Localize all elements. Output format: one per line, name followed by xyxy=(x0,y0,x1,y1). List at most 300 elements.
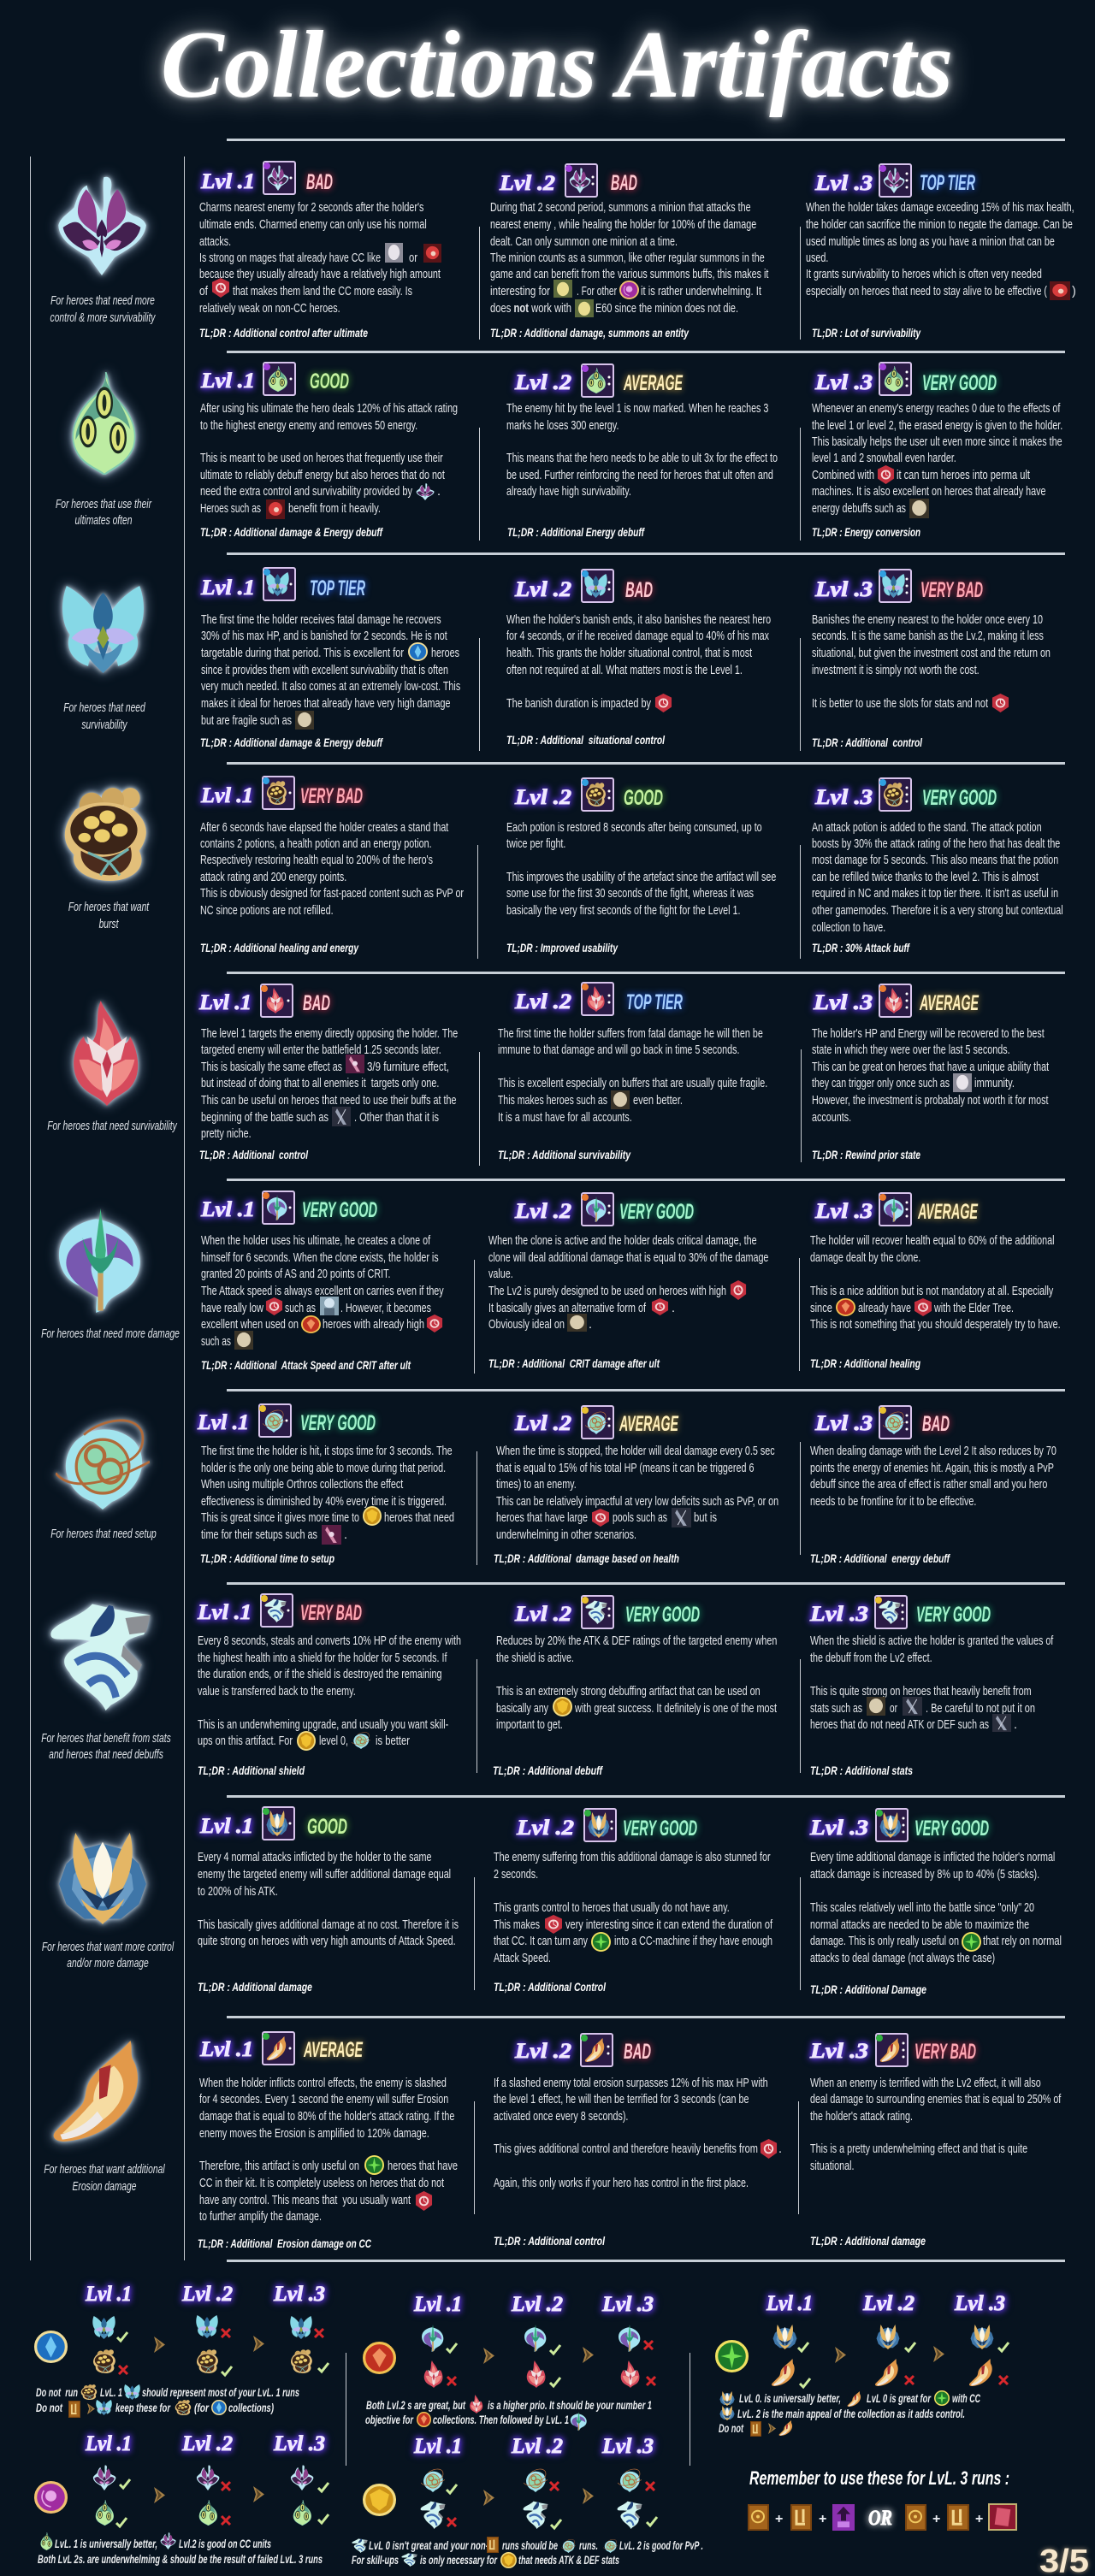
audience caption xyxy=(44,2162,166,2193)
description inline row xyxy=(199,2156,458,2211)
class icon xyxy=(717,2342,747,2371)
tldr: TL;DR : Additional damage & Energy debuff xyxy=(200,736,383,749)
description: This is a nice addition but is not mandatory at all. Especially xyxy=(810,1283,1054,1297)
class icon xyxy=(36,2483,66,2512)
description inline row: . However, it becomes xyxy=(340,1302,431,1315)
audience caption xyxy=(50,293,156,324)
level headers: Lvl .1 xyxy=(766,2292,813,2315)
description: The level 1 targets the enemy directly opposing the holder. The xyxy=(201,1025,458,1040)
description: already have high survivability. xyxy=(506,483,631,498)
advice: Both LvL 2s. are underwhelming & should be the result of failed LvL. 3 runs xyxy=(38,2552,323,2566)
description: to the highest energy enemy and removes 50 energy. xyxy=(200,417,417,432)
advice: For skill-ups xyxy=(352,2553,399,2567)
description inline row: pools such as xyxy=(613,1511,667,1525)
card xyxy=(263,1807,294,1840)
level 3 xyxy=(812,570,1051,749)
level headers: Lvl .1 xyxy=(413,2293,462,2316)
description: be used. Further reinforcing the need for heroes that ult often and xyxy=(506,467,773,482)
description: used multiple times as long as you have a minion that can be xyxy=(806,233,1055,248)
level 2 xyxy=(490,164,769,340)
rating: TOP TIER xyxy=(920,171,975,195)
advice: Do not xyxy=(719,2421,744,2435)
level headers: Lvl .3 xyxy=(601,2293,654,2316)
description inline row xyxy=(496,1508,717,1527)
level headers: Lvl .2 xyxy=(181,2432,233,2455)
description inline row: since xyxy=(810,1302,832,1315)
description inline row xyxy=(506,694,672,712)
level 3 xyxy=(809,1596,1054,1777)
level 1: Lvl .1 xyxy=(199,2038,253,2061)
description: the level 1 effect, he will then be terrified for 3 seconds (can be xyxy=(494,2091,749,2106)
level 1 xyxy=(198,984,458,1161)
description inline row: such as xyxy=(201,1335,231,1349)
tldr: TL;DR : Additional control xyxy=(494,2234,606,2248)
description inline row: . Be careful to not put it on xyxy=(926,1702,1035,1716)
description inline row: This gives additional control and therefore heavily benefits from xyxy=(494,2142,758,2156)
audience caption xyxy=(68,900,150,931)
tldr: TL;DR : Additional Damage xyxy=(810,1982,926,1996)
level 2 xyxy=(506,364,778,539)
audience caption: ultimates often xyxy=(75,513,132,527)
description: investment it is simply not worth the cost. xyxy=(812,662,980,676)
level 2: Lvl .2 xyxy=(514,2040,571,2063)
description: Whenever an enemy's energy reaches 0 due to the effects of xyxy=(812,400,1061,415)
tldr: TL;DR : Additional debuff xyxy=(493,1764,603,1777)
tldr: TL;DR : Additional stats xyxy=(810,1764,913,1777)
audience caption xyxy=(41,1731,171,1761)
rating: GOOD xyxy=(307,1815,347,1839)
rating: VERY GOOD xyxy=(623,1817,697,1840)
description: game and can benefit from the various summons buffs, this makes it xyxy=(490,266,769,281)
description: 30% of his max HP, and is banished for 2 seconds. He is not xyxy=(201,628,447,642)
description: dealt. Can only summon one minion at a time. xyxy=(490,233,678,248)
description inline row: This makes heroes such as xyxy=(498,1094,607,1108)
description: 2 seconds. xyxy=(494,1866,538,1881)
description xyxy=(201,1443,453,1508)
description: This can be useful on heroes that need to use their buffs at the xyxy=(201,1092,456,1107)
description xyxy=(812,400,1062,498)
description inline row xyxy=(494,2139,782,2159)
level 1 xyxy=(200,777,465,954)
card xyxy=(582,1406,613,1439)
advice: should represent most of your LvL. 1 runs xyxy=(142,2385,299,2399)
description: The Attack speed is always excellent on carries even if they xyxy=(201,1283,444,1297)
level 2: Lvl .2 xyxy=(514,1603,571,1626)
description: relatively weak on non-CC heroes. xyxy=(199,300,340,315)
description: This is an extremely strong debuffing artifact that can be used on xyxy=(496,1683,761,1698)
description: enemy moves the Erosion is amplified to 120% damage. xyxy=(199,2125,429,2140)
level 2: Lvl .2 xyxy=(516,1817,574,1840)
card xyxy=(876,2034,908,2066)
advice: LvL 0 is great for xyxy=(867,2391,932,2405)
card xyxy=(263,777,294,809)
description inline row: 3/9 furniture effect, xyxy=(367,1061,449,1074)
card xyxy=(581,2034,613,2066)
level headers: Lvl .3 xyxy=(954,2292,1005,2315)
description: However, the investment is probabaly not worth it for most xyxy=(812,1092,1049,1107)
description xyxy=(494,1849,771,1964)
card xyxy=(565,164,597,197)
audience caption: survivability xyxy=(81,718,127,731)
card xyxy=(879,570,911,602)
description: to further amplify the damage. xyxy=(199,2208,322,2223)
level 1: Lvl .1 xyxy=(200,369,255,393)
card xyxy=(263,363,295,395)
artifact icon xyxy=(74,1001,138,1106)
priority panel: red class xyxy=(364,2293,655,2431)
description: The first time the holder is hit, it stops time for 3 seconds. The xyxy=(201,1443,453,1457)
reminder cards: + xyxy=(819,2512,826,2526)
description: This can be great on heroes that have a unique ability that xyxy=(812,1059,1050,1073)
card xyxy=(582,1193,613,1226)
description: required in NC and makes it top tier there. It isn't as useful in xyxy=(812,885,1058,900)
description inline row: is better xyxy=(376,1734,410,1748)
description: activated once every 8 seconds). xyxy=(494,2108,628,2123)
rating: VERY GOOD xyxy=(619,1200,694,1224)
description: points the energy of enemies hit. Again, this is mostly a PvP xyxy=(810,1460,1054,1474)
card xyxy=(263,2032,294,2065)
tldr: TL;DR : Additional energy debuff xyxy=(810,1551,950,1565)
description inline row xyxy=(490,280,761,317)
description: health. This grants the holder situational control, that is most xyxy=(506,645,752,659)
description inline row: . xyxy=(672,1302,675,1315)
description inline row: E60 since the minion does not die. xyxy=(595,302,738,316)
description inline row: such as xyxy=(285,1302,316,1315)
description: This is not something that you should desperately try to have. xyxy=(810,1316,1061,1331)
description xyxy=(810,1232,1061,1331)
rating: VERY BAD xyxy=(914,2040,976,2064)
audience caption: For heroes that want more control xyxy=(42,1940,175,1953)
artifact icon xyxy=(73,372,135,475)
tldr: TL;DR : Additional damage xyxy=(198,1980,312,1994)
description inline row: but are fragile such as xyxy=(201,714,292,728)
description inline row xyxy=(496,1698,777,1716)
level 1 xyxy=(197,1594,461,1777)
advice: is a higher prio. It should be your number 1 xyxy=(488,2398,652,2412)
description: When the holder takes damage exceeding 15% of his max health, xyxy=(806,199,1074,214)
tldr: TL;DR : Improved usability xyxy=(506,941,619,954)
class icon xyxy=(364,2343,394,2372)
description: himself for 6 seconds. When the clone exists, the holder is xyxy=(201,1250,439,1264)
description inline row: level 0, xyxy=(319,1734,348,1748)
description xyxy=(498,1025,767,1124)
tldr: TL;DR : Additional control xyxy=(199,1148,309,1161)
advice: keep these for xyxy=(115,2401,171,2414)
audience caption: and heroes that need debuffs xyxy=(49,1747,163,1761)
audience caption: For heroes that benefit from stats xyxy=(41,1731,171,1745)
audience caption xyxy=(56,497,152,527)
artifact icon xyxy=(54,2041,138,2142)
description: When the shield is active the holder is granted the values of xyxy=(810,1633,1054,1647)
advice: (for xyxy=(194,2401,210,2414)
description inline row: The banish duration is impacted by xyxy=(506,697,652,711)
description: twice per fight. xyxy=(506,836,565,850)
card xyxy=(879,1193,911,1226)
level headers: Lvl .2 xyxy=(511,2293,563,2316)
description: This means that the hero needs to be able to ult 3x for the effect to xyxy=(506,450,778,464)
description xyxy=(506,819,776,917)
card xyxy=(263,162,295,194)
rating: BAD xyxy=(625,578,653,602)
advice: is only necessary for xyxy=(420,2553,498,2567)
level 1: Lvl .1 xyxy=(200,784,253,807)
rating: AVERAGE xyxy=(303,2038,364,2062)
level 2 xyxy=(488,1193,768,1370)
upgrade grid xyxy=(421,2469,657,2529)
level headers: Lvl .1 xyxy=(85,2432,132,2455)
description: targeted enemy will enter the battlefield 1.25 seconds later. xyxy=(201,1042,441,1056)
advice xyxy=(352,2537,703,2567)
card xyxy=(582,983,613,1015)
description: It grants survivability to heroes which is often very needed xyxy=(806,266,1042,281)
description inline row: of xyxy=(199,285,209,298)
row 4: sack artifact xyxy=(65,777,1063,954)
description xyxy=(496,1633,777,1731)
description: Respectively restoring health equal to 200% of the hero's xyxy=(200,852,433,866)
description inline row: need the extra control and survivability provided by xyxy=(200,485,413,499)
description inline row xyxy=(806,281,1076,300)
left column rule xyxy=(30,157,31,2260)
description: boosts by 30% the attack rating of the hero that has dealt the xyxy=(812,836,1060,850)
description: When the holder inflicts control effects, the enemy is slashed xyxy=(199,2075,447,2089)
description: This can be relatively impactful at very low deficits such as PvP, or on xyxy=(496,1493,778,1508)
advice: collections) xyxy=(228,2401,274,2414)
rating: BAD xyxy=(303,991,330,1015)
level headers: Lvl .2 xyxy=(511,2435,563,2458)
level 2: Lvl .2 xyxy=(514,786,571,809)
description: for 4 secondes. Every 1 second the enemy will suffer Erosion xyxy=(199,2091,448,2106)
description inline row xyxy=(494,1915,773,1951)
description xyxy=(198,1633,461,1731)
description inline row xyxy=(812,694,1009,712)
description: quite strong on heroes with very high amounts of Attack Speed. xyxy=(198,1933,456,1947)
description inline row xyxy=(201,1297,442,1350)
audience caption: For heroes that want additional xyxy=(44,2162,166,2176)
description: CC in their kit. It is completely useless on heroes that do not xyxy=(199,2175,444,2189)
description: When using multiple Orthros collections the effect xyxy=(201,1476,404,1491)
level 2: Lvl .2 xyxy=(514,1412,571,1435)
card xyxy=(261,1594,293,1627)
tldr: TL;DR : Additional damage & Energy debuff xyxy=(200,525,383,539)
description: damage dealt by the clone. xyxy=(810,1250,920,1264)
description xyxy=(198,1849,459,1947)
description: underwhelming in other scenarios. xyxy=(496,1527,636,1541)
description inline row: . Other than that it is xyxy=(354,1111,439,1125)
description: Each potion is restored 8 seconds after being consumed, up to xyxy=(506,819,762,834)
description xyxy=(506,612,771,676)
description: attack rating and 200 energy points. xyxy=(200,869,346,883)
reminder cards: + xyxy=(932,2512,940,2526)
level 3: Lvl .3 xyxy=(814,786,873,809)
description: When an enemy is terrified with the Lv2 effect, it will also xyxy=(810,2075,1041,2089)
level 3: Lvl .3 xyxy=(814,1200,873,1223)
tldr: TL;DR : Additional healing and energy xyxy=(200,941,359,954)
description xyxy=(200,819,465,917)
card xyxy=(879,1406,911,1439)
priority panel: magenta class xyxy=(36,2432,328,2566)
description: effectiveness is diminished by 40% every time it is triggered. xyxy=(201,1493,447,1508)
card xyxy=(582,1596,613,1628)
description inline row: damage. This is only really useful on xyxy=(810,1935,959,1948)
level headers: Lvl .1 xyxy=(413,2435,462,2458)
description: normal attacks are needed to be able to maximize the xyxy=(810,1917,1029,1931)
tldr: TL;DR : Rewind prior state xyxy=(812,1148,920,1161)
description inline row xyxy=(198,1732,410,1750)
description: Again, this only works if your hero has control in the first place. xyxy=(494,2175,749,2189)
audience caption: and/or more damage xyxy=(67,1956,149,1970)
description: needs to be frontline for it to be effective. xyxy=(810,1493,976,1508)
description: The holder will recover health equal to 60% of the additional xyxy=(810,1232,1055,1247)
description: When dealing damage with the Level 2 It also reduces by 70 xyxy=(810,1443,1057,1457)
description: very much needed. It also comes at an extremely low-cost. This xyxy=(201,678,460,693)
description: state in which they were over the last 5 seconds. xyxy=(812,1042,1010,1056)
description: The enemy suffering from this additional damage is also stunned for xyxy=(494,1849,771,1864)
description inline row: Combined with xyxy=(812,469,874,482)
advice: Lvl.2 is good on CC units xyxy=(179,2537,271,2550)
description inline row: that CC. It can turn any xyxy=(494,1935,589,1948)
advice xyxy=(365,2395,652,2431)
card xyxy=(259,1404,291,1437)
rating: AVERAGE xyxy=(917,1200,979,1224)
row 6: sword artifact xyxy=(41,1191,1061,1372)
description inline row: have really low xyxy=(201,1302,263,1315)
description: This is obviously designed for fast-paced content such as PvP or xyxy=(200,885,465,900)
description inline row: ups on this artifact. For xyxy=(198,1734,293,1748)
tldr: TL;DR : Additional damage xyxy=(810,2234,926,2248)
audience caption: For heroes that need survivability xyxy=(47,1119,177,1132)
level 1 xyxy=(200,1191,444,1372)
rating: VERY BAD xyxy=(300,784,363,808)
card xyxy=(582,570,613,602)
level 1 xyxy=(200,363,458,539)
description inline row: they can trigger only once such as xyxy=(812,1077,950,1090)
description inline row: The Lv2 is purely designed to be used on heroes with high xyxy=(488,1285,726,1298)
level headers: Lvl .3 xyxy=(273,2283,325,2306)
description: attacks to deal damage (not always the case) xyxy=(810,1950,995,1964)
advice: LvL 0. is universally better, xyxy=(739,2391,841,2405)
description xyxy=(199,2075,454,2223)
tldr: TL;DR : Additional survivability xyxy=(498,1148,631,1161)
rating: VERY BAD xyxy=(300,1601,362,1625)
advice: LvL. 2 is good for PvP . xyxy=(619,2538,703,2552)
description: accounts. xyxy=(812,1109,851,1124)
rating: VERY GOOD xyxy=(300,1411,376,1435)
class icon xyxy=(364,2485,394,2514)
level headers: Lvl .3 xyxy=(273,2432,325,2455)
audience caption: burst xyxy=(99,917,119,931)
level 1: Lvl .1 xyxy=(197,1601,252,1624)
advice: collections. Then followed by LvL. 1 xyxy=(433,2413,569,2426)
description: used. xyxy=(806,250,828,264)
description: Attack Speed. xyxy=(494,1950,551,1964)
level 1: Lvl .1 xyxy=(200,170,255,193)
description xyxy=(810,1849,1055,1964)
advice: with CC xyxy=(952,2391,981,2405)
audience caption: For heroes that need more xyxy=(50,293,155,307)
description inline row: but is xyxy=(694,1511,717,1525)
description xyxy=(199,199,441,315)
description xyxy=(201,1232,444,1297)
card xyxy=(879,363,911,395)
description: This basically helps the user ult even more since it makes the xyxy=(812,434,1062,448)
description: This is a pretty underwhelming effect and that is quite xyxy=(810,2141,1027,2155)
description: collection to have. xyxy=(812,919,885,934)
description xyxy=(810,2075,1062,2172)
description inline row: basically any xyxy=(496,1702,549,1716)
description: damage that is equal to 80% of the holder's attack rating. If the xyxy=(199,2108,454,2123)
description: times) to an enemy. xyxy=(496,1476,577,1491)
description inline row: have any control. This means that you usually want xyxy=(199,2194,411,2207)
rating: AVERAGE xyxy=(919,991,980,1015)
description inline row xyxy=(810,1298,1014,1316)
description: The enemy hit by the level 1 is now marked. When he reaches 3 xyxy=(506,400,768,415)
description: This is meant to be used on heroes that frequently use their xyxy=(200,450,443,464)
description inline row: that rely on normal xyxy=(983,1935,1062,1948)
rating: VERY GOOD xyxy=(922,371,997,395)
title: Collections Artifacts xyxy=(161,12,953,118)
advice xyxy=(38,2532,323,2566)
description inline row: heroes that do not need ATK or DEF such as xyxy=(810,1718,989,1732)
advice xyxy=(36,2384,299,2418)
description inline row: beginning of the battle such as xyxy=(201,1111,328,1125)
reminder cards: + xyxy=(775,2512,783,2526)
description: The first time the holder receives fatal damage he recovers xyxy=(201,612,441,626)
level 3: Lvl .3 xyxy=(814,578,873,601)
description: the level 1 or level 2, the erased energy is given to the holder. xyxy=(812,417,1062,432)
description xyxy=(810,1443,1057,1508)
description inline row: It basically gives an alternative form of xyxy=(488,1302,647,1315)
reminder cards: + xyxy=(975,2512,983,2526)
description inline row xyxy=(201,643,459,730)
level headers xyxy=(85,2432,325,2455)
level headers xyxy=(413,2293,654,2316)
description xyxy=(812,612,1051,676)
description inline row xyxy=(812,1073,1015,1092)
level 3: Lvl .3 xyxy=(809,1817,868,1840)
rating: VERY GOOD xyxy=(302,1198,377,1222)
description: some use for the first 30 seconds of the fight, whereas it was xyxy=(506,885,754,900)
description inline row: . xyxy=(1014,1718,1017,1732)
tldr: TL;DR : Additional situational control xyxy=(506,733,666,747)
description inline row: very interesting since it can extend the duration of xyxy=(565,1918,773,1932)
level 2: Lvl .2 xyxy=(514,1200,571,1223)
level 1 xyxy=(197,1404,454,1565)
description: nearest enemy , while healing the holder for 100% of the damage xyxy=(490,216,756,231)
description inline row: or xyxy=(409,251,417,265)
tldr: TL;DR : Additional damage, summons an entity xyxy=(490,326,690,340)
description: but instead of doing that to all enemies it targets only one. xyxy=(201,1075,439,1090)
description inline row: it can turn heroes into perma ult xyxy=(897,469,1030,482)
description: Every 4 normal attacks inflicted by the holder to the same xyxy=(198,1849,431,1864)
description: After using his ultimate the hero deals 120% of his attack rating xyxy=(200,400,458,415)
description inline row: heroes with already high xyxy=(323,1318,424,1332)
description: attack damage is increased by 8% up to 40% (5 stacks). xyxy=(810,1866,1039,1881)
audience caption: control & more survivability xyxy=(50,310,156,324)
level 3: Lvl .3 xyxy=(814,172,873,195)
description: the highest health into a shield for the holder for 5 seconds. If xyxy=(198,1650,447,1664)
description inline row: does not work with xyxy=(490,302,571,316)
description: the debuff from the Lv2 effect. xyxy=(810,1650,932,1664)
description inline row: energy debuffs such as xyxy=(812,502,906,516)
level headers: Lvl .1 xyxy=(85,2283,132,2306)
rating: VERY GOOD xyxy=(922,786,997,810)
description: Every 8 seconds, steals and converts 10% HP of the enemy with xyxy=(198,1633,461,1647)
rating: VERY GOOD xyxy=(625,1603,700,1627)
description: This is excellent especially on buffers that are usually quite fragile. xyxy=(498,1075,767,1090)
description: enemy the targeted enemy will suffer additional damage equal xyxy=(198,1866,451,1881)
level 2: Lvl .2 xyxy=(514,990,571,1013)
level 1 xyxy=(199,162,441,340)
